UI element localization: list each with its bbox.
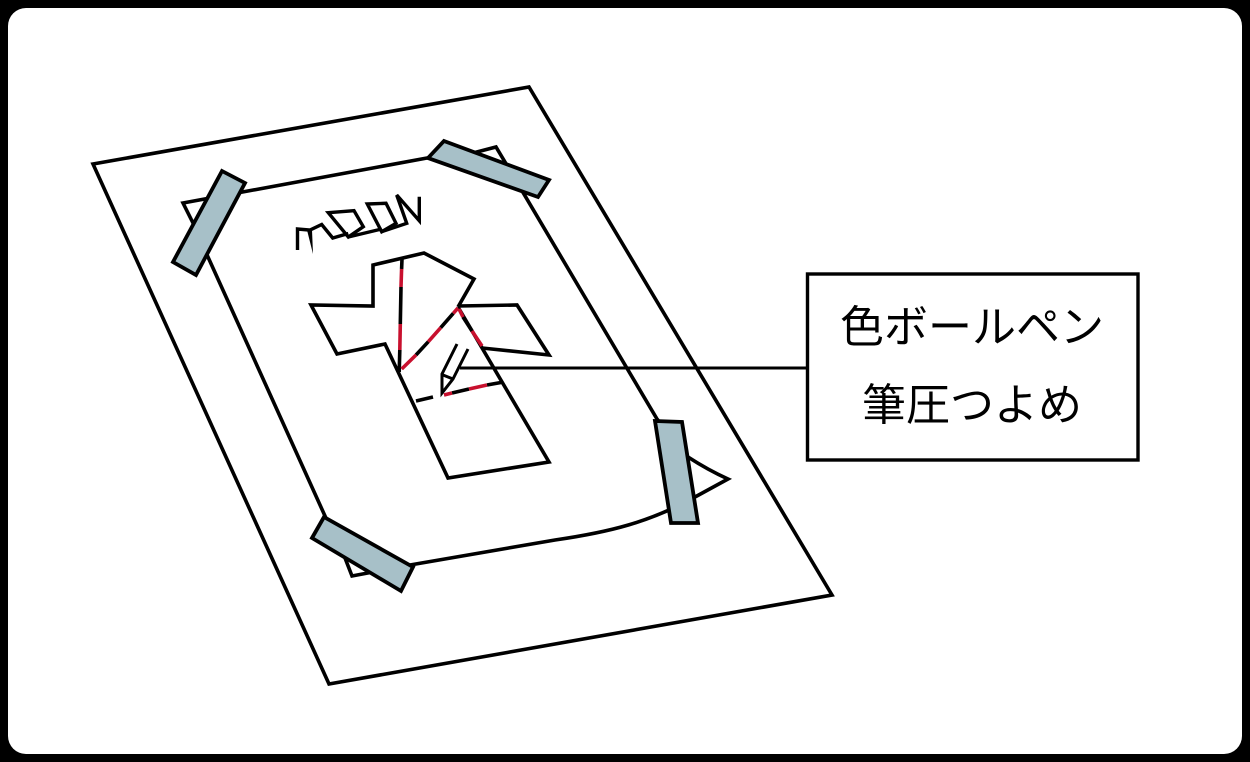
tape: bottom right: [655, 421, 698, 523]
icon: ballpoint pen: [442, 344, 468, 393]
tape: top left: [173, 171, 245, 275]
pattern paper outline: [183, 147, 728, 576]
fold line: diagonal, dashed black and red: [402, 308, 458, 369]
tape: bottom left: [312, 517, 413, 591]
fold line: vertical, dashed black and red: [399, 259, 402, 372]
base paper sheet: [93, 87, 832, 684]
callout box: [808, 274, 1138, 460]
tape: top right: [428, 141, 549, 197]
garment body and left sleeve outline: [311, 253, 549, 478]
callout: [808, 274, 1138, 460]
fold line: right, dashed black and red: [459, 309, 482, 346]
right sleeve outline: [458, 305, 549, 355]
handwritten label: moon: [298, 195, 419, 254]
garment pattern: kimono shape: [311, 253, 549, 478]
hem line: partially traced: [416, 382, 501, 401]
callout text line 2: 筆圧つよめ: [862, 381, 1082, 430]
leader line to callout: [460, 366, 807, 370]
callout text line 1: 色ボールペン: [840, 303, 1104, 352]
